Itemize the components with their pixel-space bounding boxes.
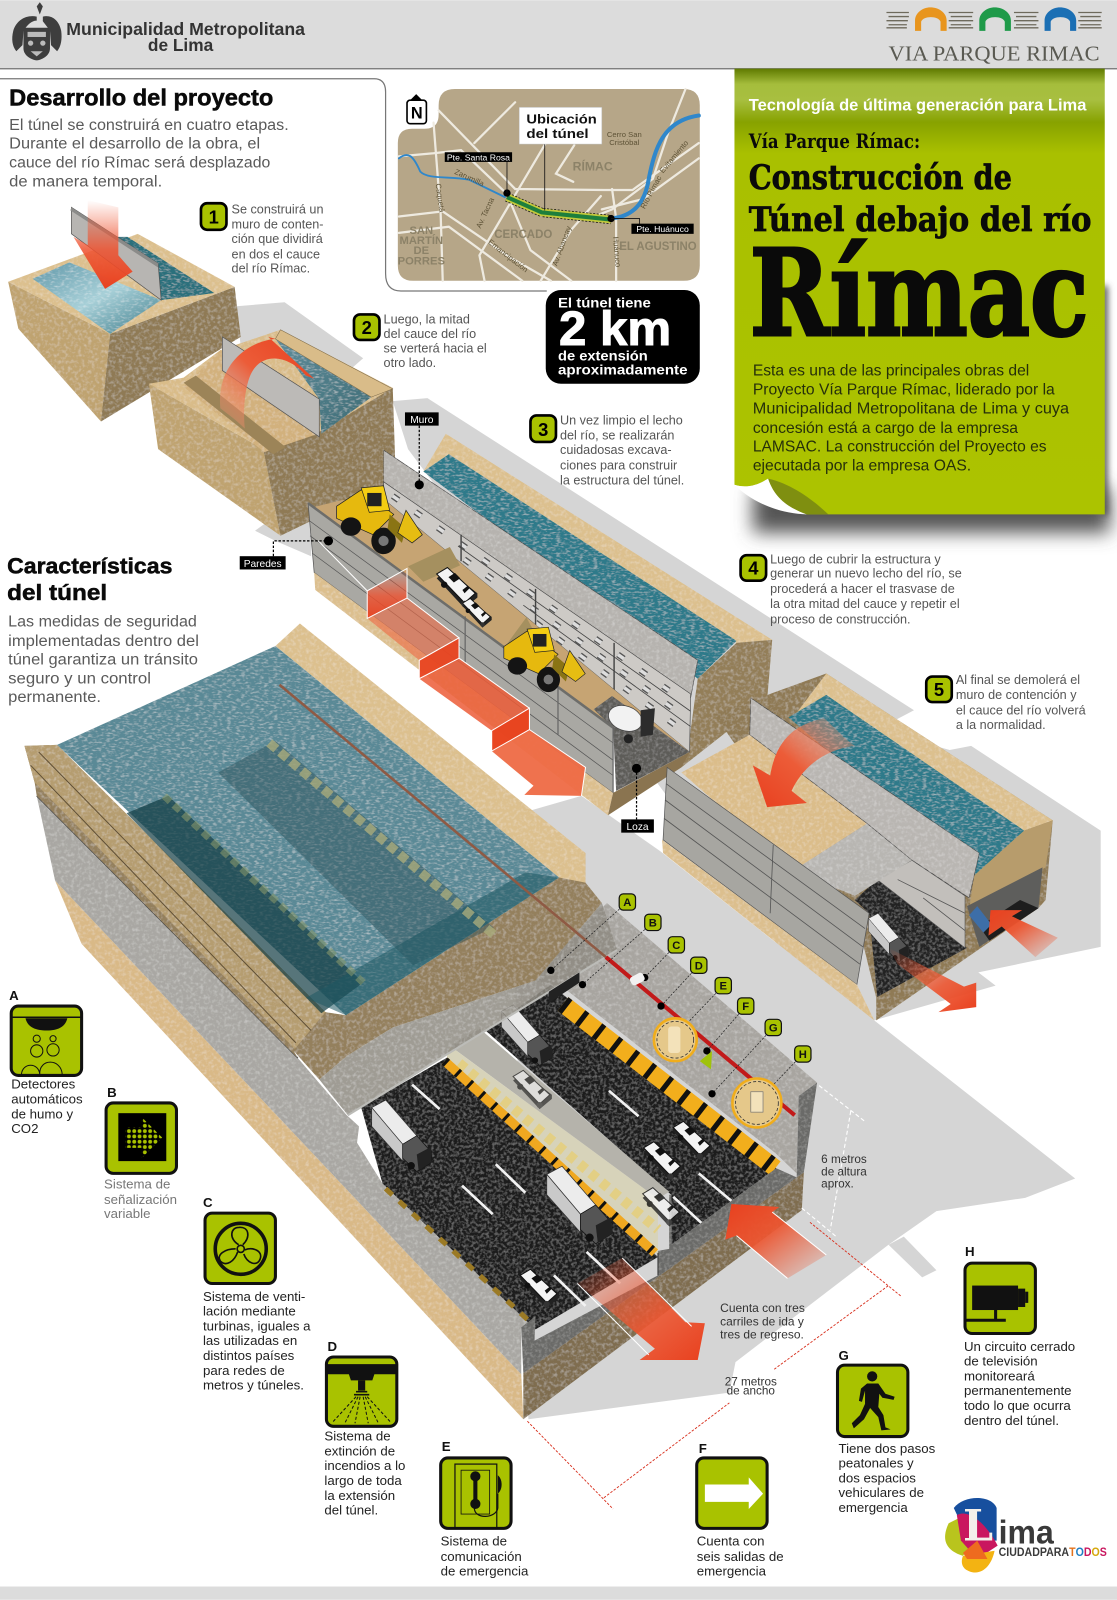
feature F: emergency exits: F [699, 1441, 707, 1456]
base [314, 573, 613, 815]
icon: smoke detector [11, 1006, 82, 1075]
median [450, 1029, 669, 1199]
step 1 illustration: block [8, 200, 241, 422]
callout: 2 km: 2 km [559, 303, 671, 356]
callout: 2 km: de extensión [558, 348, 648, 364]
arrow: curved fill [753, 718, 855, 807]
annotation: lanes [720, 1302, 805, 1342]
lane markings [412, 1085, 731, 1306]
dimension lines [527, 1086, 902, 1509]
callout: ubicación del túnel [519, 107, 602, 144]
map district and road labels: Huánuco [611, 236, 623, 268]
feature C: ventilation: para redes de [203, 1363, 285, 1378]
green title panel: Tecnología de última generación para Lima [749, 95, 1087, 114]
step 5 illustration: block [662, 674, 1058, 1020]
green title panel: ejecutada por la empresa OAS. [753, 458, 971, 475]
badges A to H on tunnel [619, 894, 811, 1062]
logo: Lima ciudad para todos: CIUDADPARATODOS [999, 1545, 1107, 1559]
badge F [738, 998, 754, 1014]
logo: Lima ciudad para todos: ima [999, 1515, 1054, 1552]
step 4 badge: 4 [748, 558, 759, 579]
step 4 badge [741, 555, 766, 581]
badge B: B [649, 917, 657, 929]
feature A: detectors: A [9, 988, 19, 1003]
step 4 text: procederá a hacer el trasvase de [770, 582, 955, 596]
concrete mixer [605, 701, 655, 743]
map district and road labels: Av. Tacna [474, 195, 496, 230]
icon: phone [441, 1458, 511, 1528]
step 3 text: del río, se realizarán [560, 428, 674, 442]
intro text [9, 117, 289, 190]
device dots and leader lines [547, 902, 803, 1102]
feature C: ventilation: distintos países [203, 1348, 295, 1363]
feature E: emergency communication: de emergencia [441, 1563, 529, 1578]
step 2 text: Luego, la mitad [384, 313, 470, 327]
sign on deck edge [549, 972, 579, 1003]
step 5 text: Al final se demolerá el [956, 673, 1080, 687]
feature H: CCTV: de televisión [964, 1354, 1038, 1369]
map district and road labels: DE [414, 245, 430, 257]
feature D: fire extinguishing: extinción de [324, 1443, 395, 1458]
step 1 text: en dos el cauce [232, 247, 320, 261]
green title panel: Esta es una de las principales obras del [753, 363, 1029, 380]
feature A: detectors: automáticos [11, 1091, 83, 1106]
page curl [734, 479, 828, 514]
step 5 text: a la normalidad. [956, 718, 1046, 732]
badge B [645, 914, 661, 931]
label: Muro: Muro [410, 415, 434, 426]
retaining wall rough part [384, 450, 698, 698]
logo: Via Parque Rimac [886, 7, 1102, 65]
under-river section [24, 745, 602, 1080]
step 1 badge: 1 [209, 207, 219, 228]
map district and road labels: SAN [409, 225, 433, 237]
stepped red arrow [318, 541, 586, 796]
label: Paredes [240, 536, 333, 570]
step 4 text [741, 552, 962, 627]
badge C: C [672, 940, 680, 952]
step 3 text [530, 414, 684, 487]
step 3 badge [530, 415, 556, 442]
feature C: ventilation: metros y túneles. [203, 1378, 304, 1393]
callout: 2 km [546, 290, 700, 384]
feature G: pedestrian passages: vehiculares de [839, 1485, 924, 1500]
characteristics text: seguro y un control [8, 671, 151, 688]
feature C: ventilation: Sistema de venti- [203, 1289, 305, 1304]
icon: camera [965, 1263, 1035, 1334]
badge G: G [769, 1023, 778, 1035]
logo: Lima ciudad para todos: L [963, 1502, 993, 1552]
arrow: traffic in [725, 1204, 826, 1278]
step 4 text: Luego de cubrir la estructura y [770, 552, 941, 566]
green title panel: Municipalidad Metropolitana de Lima y cuya [753, 400, 1069, 417]
municipality name: Municipalidad Metropolitana [66, 19, 305, 39]
feature C: ventilation [203, 1195, 311, 1393]
feature D: fire extinguishing [324, 1339, 405, 1518]
feature B: variable signage [104, 1085, 177, 1221]
step 5 text: el cauce del río volverá [956, 703, 1087, 717]
logo: Via Parque Rimac: VIA PARQUE RIMAC [888, 41, 1100, 65]
map panel [398, 89, 700, 281]
step 5 text [926, 673, 1087, 732]
excavated floor [313, 499, 690, 752]
map north icon [407, 94, 426, 124]
step 4 text: generar un nuevo lecho del río, se [770, 567, 962, 581]
feature G: pedestrian passages: emergencia [839, 1500, 908, 1515]
pickup trucks [437, 568, 492, 628]
feature E: emergency communication: Sistema de [441, 1534, 507, 1549]
label: Loza: Loza [627, 822, 649, 833]
step 2 text [354, 313, 487, 370]
feature H: CCTV: monitoreará [964, 1368, 1035, 1383]
asphalt right [486, 985, 776, 1245]
loader one [337, 486, 422, 554]
ground shadows [237, 302, 1101, 1419]
river surface [57, 646, 559, 1015]
feature B: variable signage: Sistema de [104, 1177, 170, 1192]
characteristics text: Las medidas de seguridad [8, 614, 197, 631]
step 5 text: muro de contención y [956, 688, 1077, 702]
annotation: height: aprox. [821, 1178, 854, 1191]
step 1 text [201, 202, 324, 276]
badge F: F [742, 1001, 749, 1013]
characteristics text: permanente. [8, 689, 101, 706]
feature A: detectors: de humo y [11, 1106, 73, 1121]
chevrons seen through water [269, 743, 494, 935]
step 3 text: la estructura del túnel. [560, 473, 684, 487]
feature A: detectors: Detectores [11, 1077, 76, 1092]
municipality name [66, 19, 305, 55]
feature H: CCTV [964, 1244, 1075, 1428]
left bank [24, 745, 325, 1049]
characteristics text [8, 614, 199, 706]
green title panel: concesión está a cargo de la empresa [753, 420, 1018, 437]
asphalt left [361, 1056, 658, 1329]
step 4 text: la otra mitad del cauce y repetir el [770, 597, 960, 611]
feature H: CCTV: H [965, 1244, 975, 1259]
intro text: El túnel se construirá en cuatro etapas. [9, 117, 289, 134]
red pipe [280, 685, 606, 957]
map district and road labels: Av. Abancay [550, 225, 573, 267]
feature G: pedestrian passages: dos espacios [839, 1470, 916, 1485]
back bank and water [423, 434, 772, 643]
retaining wall panels [384, 482, 691, 752]
loader two [504, 627, 585, 692]
green title panel: Vía Parque Rímac: [748, 130, 920, 153]
footer band [0, 1586, 1117, 1600]
callout: ubicación del túnel: del túnel [526, 126, 589, 141]
feature F: emergency exits [697, 1441, 784, 1578]
main tunnel cutaway illustration [24, 624, 817, 1419]
arrow: curved transfer [220, 337, 314, 429]
intro text: Durante el desarrollo de la obra, el [9, 136, 260, 153]
step 2 text: del cauce del río [384, 327, 476, 341]
feature H: CCTV: Un circuito cerrado [964, 1339, 1075, 1354]
green title panel: LAMSAC. La construcción del Proyecto es [753, 439, 1047, 456]
map district and road labels: Cristóbal [609, 138, 640, 147]
map roads [399, 89, 699, 281]
feature G: pedestrian passages: peatonales y [839, 1456, 914, 1471]
green title panel: Proyecto Vía Parque Rímac, liderado por la [753, 382, 1055, 399]
map district and road labels: Río Rímac [639, 174, 663, 210]
vehicles on road [372, 1005, 712, 1308]
step 3 text: Un vez limpio el lecho [560, 414, 683, 428]
annotation: lanes: Cuenta con tres [720, 1302, 805, 1315]
step 2 text: se verterá hacia el [384, 342, 487, 356]
label: Pte. Huánuco: Pte. Huánuco [636, 224, 689, 234]
highlight circle: camera [732, 1078, 781, 1127]
map district and road labels: PORRES [398, 255, 445, 267]
map district and road labels: MARTÍN [399, 234, 443, 247]
step 5 badge: 5 [934, 679, 944, 700]
badge H: H [799, 1049, 807, 1061]
feature G: pedestrian passages: G [839, 1348, 849, 1363]
panel frame: desarrollo del proyecto [0, 79, 547, 291]
step 3 text: ciones para construir [560, 458, 677, 472]
feature C: ventilation: las utilizadas en [203, 1333, 297, 1348]
earth side [55, 881, 523, 1419]
icon: sprinkler [326, 1357, 397, 1426]
callout: 2 km: aproximadamente [558, 363, 688, 379]
arrow: tunnel out [888, 948, 976, 1012]
header band [0, 0, 1117, 69]
intro text: cauce del río Rímac será desplazado [9, 155, 270, 172]
feature E: emergency communication: comunicación [441, 1549, 522, 1564]
feature D: fire extinguishing: la extensión [324, 1488, 395, 1503]
green title panel: Túnel debajo del río [749, 199, 1091, 239]
callout: 2 km: El túnel tiene [558, 295, 651, 311]
icon: Lima coat of arms [12, 2, 62, 60]
map district and road labels: Caquetá [434, 183, 447, 213]
map district and road labels: Evitamiento [658, 139, 690, 175]
tunnel route [507, 197, 611, 220]
step 3 and 4 illustration: excavated half with walls [308, 434, 772, 815]
feature G: pedestrian passages [837, 1348, 936, 1515]
feature E: emergency communication [441, 1439, 529, 1578]
deck [319, 903, 617, 1115]
map north icon: N [411, 105, 423, 123]
feature G: pedestrian passages: Tiene dos pasos [839, 1441, 936, 1456]
feature H: CCTV: dentro del túnel. [964, 1413, 1059, 1428]
truck in tunnel [869, 913, 909, 962]
annotation: width [725, 1376, 777, 1398]
badge A [619, 894, 636, 910]
feature C: ventilation: lación mediante [203, 1304, 296, 1319]
feature D: fire extinguishing: D [327, 1339, 337, 1354]
annotation: width: de ancho [727, 1385, 775, 1398]
front panel wall [663, 767, 869, 985]
badge D [691, 957, 707, 973]
feature D: fire extinguishing: Sistema de [324, 1429, 391, 1444]
step 1 text: del río Rímac. [232, 262, 310, 276]
feature C: ventilation: turbinas, iguales a [203, 1318, 311, 1333]
feature F: emergency exits: Cuenta con [697, 1534, 765, 1549]
feature D: fire extinguishing: incendios a lo [324, 1458, 405, 1473]
icon: exit arrow [697, 1458, 767, 1528]
map district and road labels [398, 130, 697, 274]
arrow: down [73, 200, 133, 289]
dark asphalt and inner panels [855, 880, 967, 997]
annotation: height: 6 metros [821, 1153, 867, 1166]
badge E: E [720, 981, 728, 993]
map district and road labels: Emancipación [486, 238, 530, 274]
feature F: emergency exits: seis salidas de [697, 1549, 784, 1564]
cut strips [521, 1083, 817, 1373]
highlight circle: emergency phone [654, 1018, 697, 1061]
heading: Desarrollo del proyecto: Desarrollo del proyecto [9, 84, 273, 110]
step 1 text: ción que dividirá [232, 232, 324, 246]
feature H: CCTV: todo lo que ocurra [964, 1398, 1071, 1413]
front wall [308, 503, 613, 793]
callout: ubicación del túnel: Ubicación [526, 112, 597, 127]
map district and road labels: RÍMAC [573, 159, 613, 174]
badge E [715, 977, 731, 994]
map river [399, 116, 699, 219]
concrete side [37, 796, 532, 1374]
feature E: emergency communication: E [442, 1439, 451, 1454]
step 1 text: muro de conten- [232, 218, 323, 232]
sand fill and wall [681, 735, 867, 870]
logo: Lima ciudad para todos [945, 1498, 1107, 1573]
step 2 text: otro lado. [384, 356, 436, 370]
heading: Características del túnel [7, 554, 172, 605]
map district and road labels: CERCADO [494, 227, 552, 241]
step 2 badge: 2 [362, 317, 372, 338]
annotation: width: 27 metros [725, 1376, 777, 1389]
feature A: detectors [9, 988, 83, 1136]
label: Loza [621, 764, 654, 833]
front cut earth [523, 1172, 804, 1419]
feature D: fire extinguishing: del túnel. [324, 1503, 378, 1518]
municipality name: de Lima [148, 35, 214, 55]
step 1 text: Se construirá un [232, 202, 323, 216]
annotation: height [821, 1153, 867, 1191]
right bank [275, 624, 586, 883]
badge C [668, 937, 684, 953]
annotation: height: de altura [821, 1165, 867, 1178]
map district and road labels: EL AGUSTINO [619, 239, 697, 253]
icon: arrow sign [106, 1103, 176, 1173]
tunnel cross section on the right [969, 820, 1053, 910]
green title panel [734, 69, 1110, 533]
walkway [530, 903, 817, 1173]
label: Muro [405, 412, 439, 489]
step 5 badge [926, 677, 952, 702]
map district and road labels: Zarumilla [453, 167, 486, 189]
badge A: A [623, 897, 631, 909]
heading: Características del túnel: del túnel [7, 580, 107, 605]
intro text: de manera temporal. [9, 173, 162, 190]
arrow: tunnel in [988, 910, 1058, 957]
icon: turbine [205, 1213, 275, 1284]
step 3 text: cuidadosas excava- [560, 443, 672, 457]
feature H: CCTV: permanentemente [964, 1383, 1072, 1398]
feature D: fire extinguishing: largo de toda [324, 1473, 402, 1488]
annotation: lanes: carriles de ida y [720, 1315, 804, 1328]
label: Paredes: Paredes [244, 559, 282, 570]
right yellow stripe [563, 1004, 775, 1168]
characteristics text: implementadas dentro del [8, 633, 199, 650]
step 4 text: proceso de construcción. [770, 613, 911, 627]
heading: Características del túnel: Características [7, 554, 172, 579]
left curb stripe [386, 1189, 530, 1322]
feature A: detectors: CO2 [11, 1121, 38, 1136]
feature B: variable signage: señalización [104, 1192, 177, 1207]
feature F: emergency exits: emergencia [697, 1563, 767, 1578]
badge H [795, 1046, 811, 1062]
feature C: ventilation: C [203, 1195, 213, 1210]
label: Pte. Santa Rosa: Pte. Santa Rosa [447, 152, 510, 162]
feature B: variable signage: B [107, 1085, 117, 1100]
step 3 badge: 3 [538, 419, 548, 440]
icon: pedestrian [837, 1365, 908, 1437]
badge G [765, 1019, 781, 1036]
badge D: D [695, 960, 703, 972]
characteristics text: túnel garantiza un tránsito [8, 651, 198, 668]
arrow: traffic out [577, 1258, 705, 1360]
step 2 illustration: block [149, 330, 396, 536]
annotation: lanes: tres de regreso. [720, 1329, 804, 1342]
green title panel: Construcción de [749, 157, 1012, 197]
feature B: variable signage: variable [104, 1206, 150, 1221]
map district and road labels: Cerro San [607, 130, 642, 139]
